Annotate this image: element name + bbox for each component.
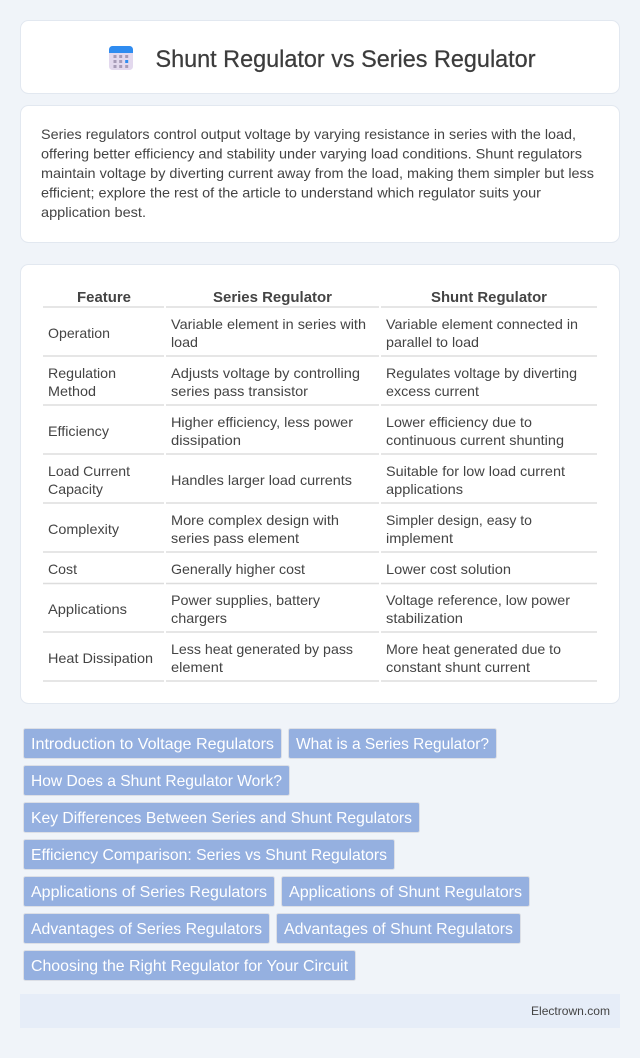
tag — [282, 876, 530, 906]
text block: intro paragraph: efficient; explore the rest of the article to understand which regulator suits your — [41, 184, 541, 200]
tag: Introduction to Voltage Regulators — [31, 736, 274, 753]
row: load current capacity — [43, 463, 597, 503]
row: cost — [43, 561, 597, 584]
row: heat dissipation: element — [171, 659, 223, 675]
table header: Series Regulator — [213, 289, 332, 306]
row: complexity: series pass element — [171, 530, 299, 546]
row: cost: Cost — [48, 561, 77, 577]
footer: Electrown.com — [531, 1004, 610, 1018]
row: operation: Variable element connected in — [386, 316, 578, 332]
row: heat dissipation: Heat Dissipation — [48, 650, 153, 666]
row: efficiency — [43, 414, 597, 454]
panel: comparison table — [20, 264, 620, 704]
table header — [43, 289, 597, 307]
row: efficiency: dissipation — [171, 432, 241, 448]
text block: intro paragraph: Series regulators control output voltage by varying resistance in series with the load, — [41, 126, 576, 142]
tag: Key Differences Between Series and Shunt Regulators — [31, 810, 412, 827]
row: heat dissipation: constant shunt current — [386, 659, 530, 675]
tag: Applications of Series Regulators — [31, 884, 267, 901]
tag: Applications of Shunt Regulators — [289, 884, 522, 901]
row: applications: stabilization — [386, 610, 463, 626]
icon: calendar — [109, 46, 133, 70]
row: regulation method: Adjusts voltage by controlling — [171, 365, 360, 381]
title: Shunt Regulator vs Series Regulator — [156, 46, 536, 73]
tag — [24, 728, 282, 758]
row: complexity: Complexity — [48, 521, 119, 537]
row: efficiency: continuous current shunting — [386, 432, 564, 448]
row: operation: load — [171, 334, 198, 350]
tag — [24, 802, 420, 832]
row: efficiency: Efficiency — [48, 423, 109, 439]
tag: Advantages of Shunt Regulators — [284, 921, 513, 938]
table header: Shunt Regulator — [431, 289, 547, 306]
row: regulation method: excess current — [386, 383, 479, 399]
row: regulation method: series pass transistor — [171, 383, 308, 399]
row: operation — [43, 316, 597, 356]
row: complexity: Simpler design, easy to — [386, 512, 532, 528]
row: regulation method: Regulates voltage by diverting — [386, 365, 577, 381]
row: load current capacity: Capacity — [48, 481, 103, 497]
text block: intro paragraph: application best. — [41, 204, 146, 220]
panel: topic tags — [24, 728, 530, 980]
row: operation: Operation — [48, 325, 110, 341]
panel: title card — [20, 20, 620, 94]
row: cost: Lower cost solution — [386, 561, 511, 577]
row: heat dissipation — [43, 641, 597, 681]
tag: Choosing the Right Regulator for Your Circuit — [31, 958, 349, 975]
row: operation: parallel to load — [386, 334, 479, 350]
text block: intro paragraph: maintain voltage by diverting current away from the load, making them simpler but less — [41, 165, 594, 181]
tag: How Does a Shunt Regulator Work? — [31, 773, 282, 790]
row: efficiency: Lower efficiency due to — [386, 414, 532, 430]
row: applications: Applications — [48, 601, 127, 617]
text block: intro paragraph: offering better efficiency and stability under varying load conditions. Shunt regulators — [41, 146, 582, 162]
row: regulation method — [43, 365, 597, 405]
row: heat dissipation: More heat generated due to — [386, 641, 561, 657]
tag: Advantages of Series Regulators — [31, 921, 262, 938]
row: complexity: More complex design with — [171, 512, 339, 528]
panel: introduction — [20, 106, 620, 242]
tag: Efficiency Comparison: Series vs Shunt Regulators — [31, 847, 387, 864]
row: applications: chargers — [171, 610, 227, 626]
row: regulation method: Regulation — [48, 365, 116, 381]
tag — [24, 914, 270, 944]
tag — [276, 914, 520, 944]
tag — [288, 728, 496, 758]
tag — [24, 766, 290, 796]
tag — [24, 876, 274, 906]
row: applications: Voltage reference, low power — [386, 592, 570, 608]
text block: intro paragraph — [41, 126, 594, 220]
row: cost: Generally higher cost — [171, 561, 305, 577]
row: load current capacity: Handles larger load currents — [171, 472, 352, 488]
footer — [20, 994, 620, 1028]
tag — [24, 950, 356, 980]
row: heat dissipation: Less heat generated by pass — [171, 641, 353, 657]
row: efficiency: Higher efficiency, less power — [171, 414, 353, 430]
table header: Feature — [77, 289, 131, 306]
tag: What is a Series Regulator? — [296, 736, 489, 753]
row: applications: Power supplies, battery — [171, 592, 320, 608]
row: load current capacity: Load Current — [48, 463, 130, 479]
row: complexity — [43, 512, 597, 552]
row: load current capacity: Suitable for low load current — [386, 463, 565, 479]
row: regulation method: Method — [48, 383, 96, 399]
row: load current capacity: applications — [386, 481, 463, 497]
tag — [24, 840, 394, 870]
row: operation: Variable element in series with — [171, 316, 366, 332]
row: applications — [43, 592, 597, 632]
row: complexity: implement — [386, 530, 453, 546]
